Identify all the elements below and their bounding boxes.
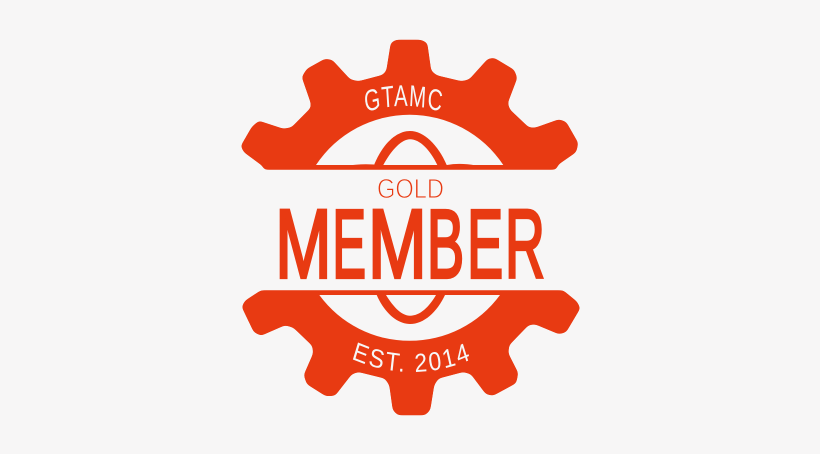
arch ring inner [383,139,437,165]
lower gear half [242,290,580,415]
MEMBER heading: E [332,190,366,299]
MEMBER heading: E [467,190,503,299]
MEMBER heading: M [275,190,332,299]
MEMBER heading: R [505,190,545,299]
wavy band top [345,164,476,166]
GOLD label: GOLD [377,173,444,204]
EST. 2014 curved label: EST. 2014 [352,342,469,372]
MEMBER heading: M [368,190,427,299]
arch ring [377,295,445,324]
arch ring [374,131,447,165]
arch ring inner [386,295,436,316]
white arc window [316,115,503,165]
white arc window [319,295,500,341]
upper gear half [241,40,578,170]
MEMBER heading: B [427,190,464,299]
GTAMC curved label: GTAMC [365,85,442,110]
